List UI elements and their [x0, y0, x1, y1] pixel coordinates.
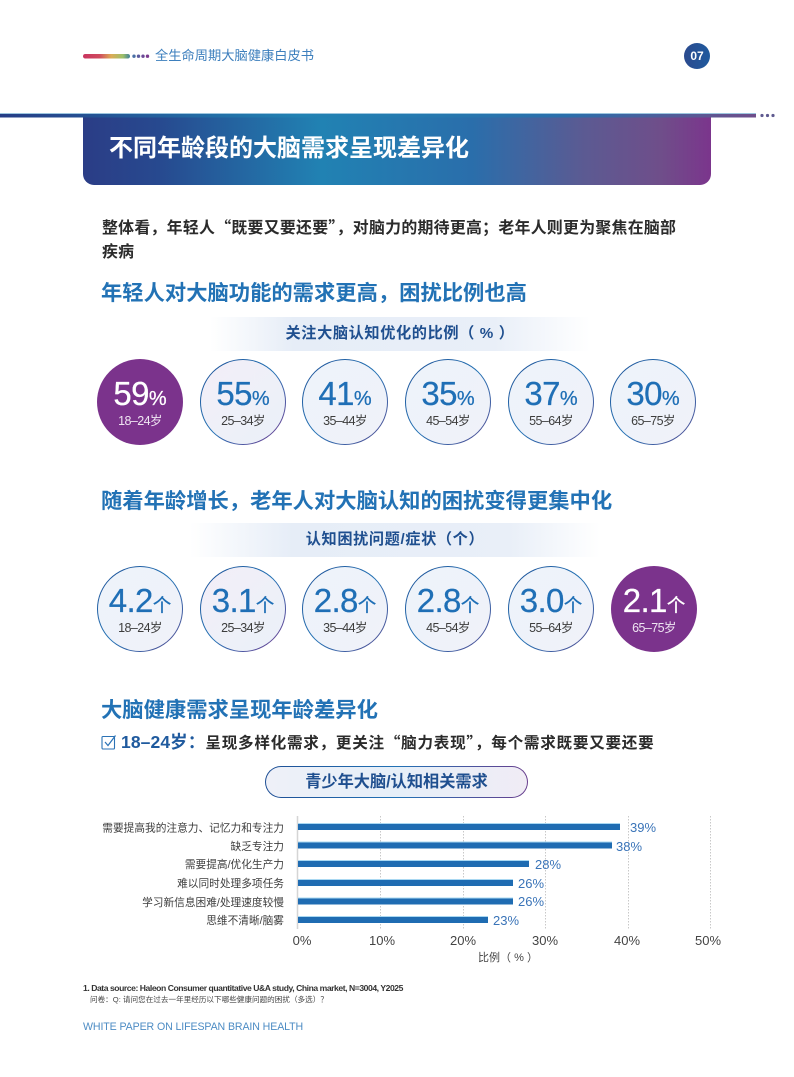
intro statement: 疾病	[102, 244, 134, 261]
stat: 45-54 35%: 35%	[421, 375, 475, 412]
bar chart: youth brain needs: 比例（ % ）	[478, 950, 538, 964]
bar chart: youth brain needs: 需要提高/优化生产力	[185, 858, 284, 871]
bar chart: youth brain needs: 需要提高我的注意力、记忆力和专注力	[102, 822, 284, 834]
stat: 25-34 3.1: 3.1个	[212, 582, 274, 619]
banner heading: 不同年龄段的大脑需求呈现差异化	[109, 135, 469, 162]
bar chart: youth brain needs: 50%	[695, 933, 721, 948]
stat: 55-64 3.0: 3.0个	[520, 582, 582, 619]
stat: 35-44 2.8: 2.8个	[314, 582, 376, 619]
stat: 45-54 2.8: 45–54岁	[426, 621, 470, 635]
heading: older people: 随着年龄增长，老年人对大脑认知的困扰变得更集中化	[101, 489, 612, 513]
band: cognitive optimisation share: 关注大脑认知优化的比例（ % ）	[286, 325, 514, 342]
bar chart: youth brain needs: 28%	[535, 857, 561, 872]
subheading text: 18–24岁：呈现多样化需求，更关注“脑力表现”，每个需求既要又要还要	[121, 731, 654, 753]
header: report running title	[83, 48, 314, 63]
stat: 18-24 59%	[97, 359, 183, 445]
stat: 65-75 30%	[610, 359, 696, 445]
stat: 55-64 3.0: 55–64岁	[529, 621, 573, 635]
bar chart: youth brain needs: 40%	[614, 933, 640, 948]
intro statement	[102, 215, 676, 261]
page number badge: 07	[690, 49, 704, 63]
title banner	[83, 116, 711, 185]
stat: 45-54 35%: 45–54岁	[426, 414, 470, 428]
intro statement: 整体看，年轻人“既要又要还要”，对脑力的期待更高；老年人则更为聚焦在脑部	[102, 215, 676, 238]
stat: 18-24 4.2: 4.2个	[109, 582, 171, 619]
bar chart: youth brain needs: 30%	[532, 933, 558, 948]
footer: white paper label: WHITE PAPER ON LIFESPAN BRAIN HEALTH	[83, 1021, 303, 1033]
stat: 25-34 3.1: 25–34岁	[221, 621, 265, 635]
bar chart: youth brain needs: 缺乏专注力	[231, 840, 284, 853]
bar chart: youth brain needs: 26%	[518, 894, 544, 909]
stat: 18-24 59%: 18–24岁	[118, 414, 162, 428]
stat: 35-44 41%	[302, 359, 388, 445]
stat: 65-75 30%: 65–75岁	[631, 414, 675, 428]
bar chart: youth brain needs: 难以同时处理多项任务	[177, 877, 284, 890]
stat: 55-64 37%: 37%	[524, 375, 578, 412]
stat: 35-44 2.8	[302, 566, 388, 652]
stat: 65-75 2.1: 2.1个	[623, 582, 685, 619]
footnote: data source	[83, 983, 404, 1004]
stat: 25-34 55%: 55%	[216, 375, 270, 412]
stat: 55-64 37%	[508, 359, 594, 445]
stat: 55-64 3.0	[508, 566, 594, 652]
bar chart: youth brain needs: 学习新信息困难/处理速度较慢	[142, 896, 284, 909]
pill: chart title: 青少年大脑/认知相关需求	[305, 773, 488, 791]
bar chart: youth brain needs: 10%	[369, 933, 395, 948]
band: cognitive optimisation share	[210, 317, 590, 351]
stat: 18-24 4.2: 18–24岁	[118, 621, 162, 635]
bar chart: youth brain needs: 39%	[630, 820, 656, 835]
stat: 55-64 37%: 55–64岁	[529, 414, 573, 428]
bar chart: youth brain needs: 23%	[493, 913, 519, 928]
stat: 45-54 2.8: 2.8个	[417, 582, 479, 619]
bar chart: youth brain needs	[102, 816, 721, 964]
stat: 45-54 35%	[405, 359, 491, 445]
bar chart: youth brain needs: 思维不清晰/脑雾	[206, 914, 284, 927]
icon: checked box	[101, 735, 116, 750]
icon: rainbow bar with dots	[83, 54, 150, 58]
pill: chart title	[265, 766, 528, 798]
stat: 45-54 2.8	[405, 566, 491, 652]
stat: 65-75 2.1: 65–75岁	[632, 621, 676, 635]
stat: 25-34 3.1	[200, 566, 286, 652]
page number badge	[684, 43, 710, 69]
stat: 25-34 55%	[200, 359, 286, 445]
bar chart: youth brain needs: 26%	[518, 876, 544, 891]
header rule with dots	[0, 113, 775, 118]
running title text: 全生命周期大脑健康白皮书	[155, 48, 314, 63]
bar chart: youth brain needs: 20%	[450, 933, 476, 948]
stat: 65-75 2.1	[611, 566, 697, 652]
stat: 35-44 41%: 41%	[318, 375, 372, 412]
stat: 35-44 41%: 35–44岁	[323, 414, 367, 428]
stat: 25-34 55%: 25–34岁	[221, 414, 265, 428]
stat: 35-44 2.8: 35–44岁	[323, 621, 367, 635]
circles row: focus percentages	[97, 359, 696, 445]
stat: 18-24 59%: 59%	[113, 375, 167, 412]
questionnaire line: 问卷：Q: 请问您在过去一年里经历以下哪些健康问题的困扰（多选）？	[90, 995, 328, 1004]
band: cognitive problems count: 认知困扰问题/症状（个）	[306, 531, 484, 548]
circles row: problem counts	[97, 566, 697, 652]
band: cognitive problems count	[190, 523, 600, 557]
source line: 1. Data source: Haleon Consumer quantitative U&A study, China market, N=3004, Y2025	[83, 983, 403, 993]
heading: brain health needs: 大脑健康需求呈现年龄差异化	[101, 698, 378, 722]
bar chart: youth brain needs: 0%	[293, 933, 312, 948]
stat: 65-75 30%: 30%	[626, 375, 680, 412]
heading: young people: 年轻人对大脑功能的需求更高，困扰比例也高	[101, 281, 527, 305]
bar chart: youth brain needs: 38%	[616, 839, 642, 854]
stat: 18-24 4.2	[97, 566, 183, 652]
subheading with check icon	[101, 731, 654, 753]
